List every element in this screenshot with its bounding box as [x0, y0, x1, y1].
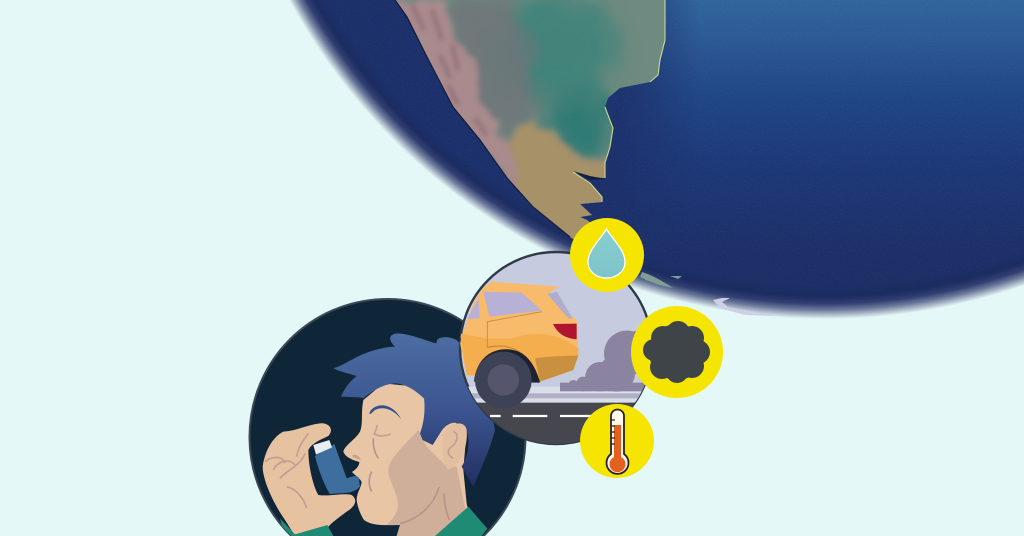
mercury	[610, 425, 626, 472]
car body	[460, 282, 578, 382]
icon: thermometer	[580, 404, 654, 478]
tube outline	[607, 410, 628, 474]
hub	[488, 364, 519, 396]
ocean	[216, 0, 1024, 318]
panel: car with exhaust	[460, 252, 654, 449]
exhaust smoke	[560, 331, 654, 392]
soft globe edge	[215, 0, 1024, 319]
globe	[215, 0, 1024, 320]
tyre	[475, 352, 532, 408]
grey mid band	[450, 0, 540, 135]
drop	[588, 229, 625, 278]
body lower tone	[460, 333, 578, 382]
cloud	[643, 321, 710, 383]
cheek and neck shadow	[387, 430, 472, 536]
eyebrow	[369, 405, 401, 419]
yellow badge	[631, 306, 723, 398]
illustration canvas	[248, 0, 1024, 536]
east coast line	[573, 0, 665, 202]
head and neck	[343, 383, 473, 536]
circle background	[250, 299, 526, 536]
continent: South America	[396, 0, 664, 240]
tail light	[553, 324, 577, 339]
tan south	[506, 118, 607, 240]
land base colour	[396, 0, 664, 240]
man figure	[263, 333, 495, 536]
hair	[333, 333, 495, 487]
western ocean shade	[316, 0, 686, 188]
finger lines	[265, 433, 308, 508]
shirt right	[435, 507, 487, 536]
pink western coast	[385, 0, 520, 190]
icon: water drop	[570, 218, 644, 292]
yellow badge	[580, 404, 654, 478]
wheel arch line	[487, 346, 540, 382]
icon: smoke cloud	[631, 306, 723, 398]
inhaler	[313, 440, 360, 494]
green interior	[493, 0, 617, 105]
side window	[467, 298, 480, 319]
car scene	[460, 282, 654, 449]
bumper shade	[535, 356, 578, 382]
asphalt	[477, 402, 635, 444]
teal coastal area	[546, 89, 614, 161]
pale southern island	[713, 298, 776, 316]
ear detail	[448, 432, 457, 458]
yellow badge	[570, 218, 644, 292]
inhaler cap	[313, 440, 332, 455]
bay shadow	[573, 171, 606, 180]
shirt left	[280, 518, 333, 536]
circle background	[460, 252, 652, 444]
mountain ridges	[412, 5, 486, 135]
road edge	[463, 387, 650, 403]
facial lines	[369, 438, 449, 523]
islands	[640, 272, 682, 288]
scale ticks	[611, 420, 615, 444]
door line	[487, 312, 542, 347]
inhaler body	[315, 444, 360, 494]
circle outline	[250, 299, 526, 536]
nostril	[352, 455, 361, 460]
tail window	[547, 292, 573, 318]
west coast line	[395, 0, 570, 237]
rear window	[483, 292, 542, 317]
lane dashes	[490, 414, 591, 418]
hand	[263, 423, 355, 536]
ocean grain	[638, 106, 1016, 258]
wheel arch	[474, 349, 540, 383]
ear	[443, 423, 467, 469]
closed eye	[373, 425, 391, 436]
kerb stripe	[463, 393, 650, 398]
panel: man using inhaler	[250, 299, 526, 536]
land colour areas	[385, 0, 620, 260]
